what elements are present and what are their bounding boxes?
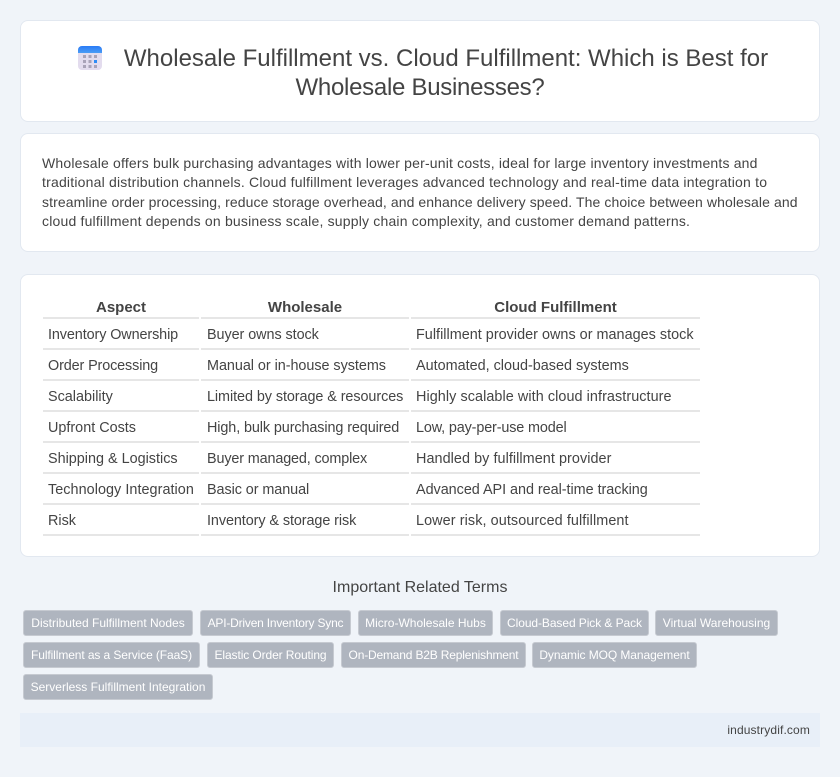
text block: introduction [42,155,798,229]
table: comparison: Low, pay-per-use model [416,420,567,436]
tags: related terms: Virtual Warehousing [663,616,770,630]
text block: introduction: traditional distribution channels. Cloud fulfillment leverages advanced technology and real-time data integration to [42,174,767,190]
title [124,45,768,101]
table: comparison: Basic or manual [207,482,309,498]
table: comparison [43,299,700,536]
tags: related terms: Micro-Wholesale Hubs [365,616,486,630]
table: comparison: Manual or in-house systems [207,358,386,374]
table: comparison: Handled by fulfillment provider [416,451,611,467]
table: comparison: Upfront Costs [48,420,136,436]
table: comparison: Cloud Fulfillment [494,299,617,316]
footer bar [20,713,820,747]
table: comparison: Automated, cloud-based systems [416,358,629,374]
tags: related terms: On-Demand B2B Replenishment [349,648,518,662]
title: Wholesale Fulfillment vs. Cloud Fulfillment: Which is Best for [124,45,768,72]
title: Wholesale Businesses? [296,74,544,101]
tags: related terms [23,610,778,700]
table: comparison: Shipping & Logistics [48,451,178,467]
icon: calendar [78,46,102,70]
tags: related terms: API-Driven Inventory Sync [208,616,343,630]
tags: related terms: Elastic Order Routing [215,648,326,662]
panel: comparison table [20,274,820,557]
tags: related terms: Distributed Fulfillment Nodes [31,616,185,630]
tags: related terms: Serverless Fulfillment Integration [31,680,205,694]
table: comparison: Wholesale [268,299,342,316]
table: comparison: Inventory Ownership [48,327,178,343]
table: comparison: Lower risk, outsourced fulfillment [416,513,629,529]
text block: introduction: Wholesale offers bulk purchasing advantages with lower per-unit costs, ideal for large inventory investments and [42,155,758,171]
table: comparison: Technology Integration [48,482,194,498]
panel: introduction [20,133,820,252]
tags: related terms: Cloud-Based Pick & Pack [507,616,642,630]
table: comparison: Highly scalable with cloud infrastructure [416,389,672,405]
tags: related terms: Dynamic MOQ Management [539,648,690,662]
text block: introduction: streamline order processing, reduce storage overhead, and enhance delivery speed. The choice between wholesale and [42,194,798,210]
panel: title header [20,20,820,122]
table: comparison: Aspect [96,299,146,316]
table: comparison: Buyer managed, complex [207,451,367,467]
text block: introduction: cloud fulfillment depends on business scale, supply chain complexity, and customer demand patterns. [42,213,690,229]
table: comparison: Order Processing [48,358,158,374]
table: comparison: Inventory & storage risk [207,513,356,529]
table: comparison: Risk [48,513,76,529]
tags: related terms: Fulfillment as a Service (FaaS) [31,648,192,662]
footer: source: industrydif.com [727,723,810,737]
heading: related terms: Important Related Terms [333,579,507,596]
table: comparison: High, bulk purchasing required [207,420,399,436]
table: comparison: Scalability [48,389,113,405]
table: comparison: Fulfillment provider owns or manages stock [416,327,694,343]
table: comparison: Buyer owns stock [207,327,319,343]
table: comparison: Limited by storage & resources [207,389,403,405]
table: comparison: Advanced API and real-time tracking [416,482,648,498]
